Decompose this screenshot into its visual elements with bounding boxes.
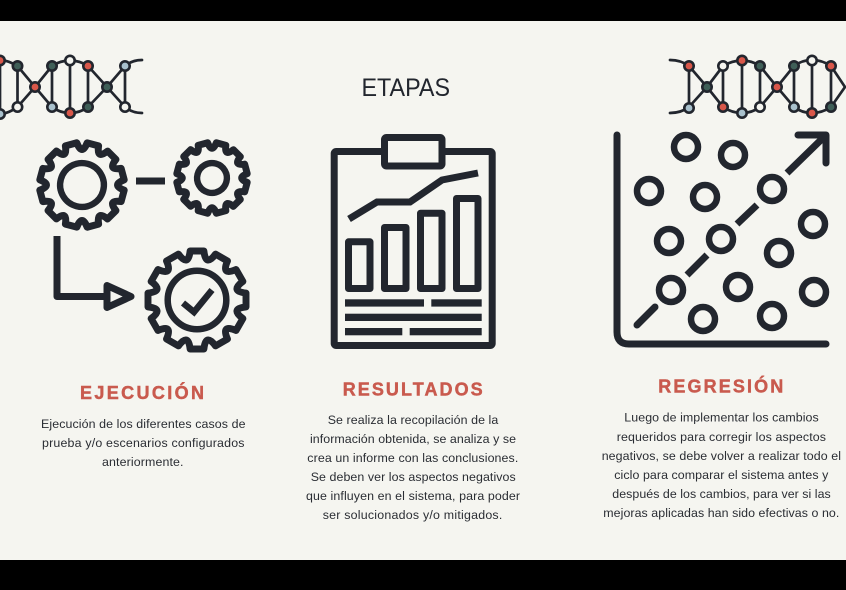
small gear bbox=[169, 135, 255, 221]
text block: ejecución bbox=[41, 417, 246, 469]
clip bbox=[384, 138, 442, 166]
text block: regresión: después de los cambios, para ver si las bbox=[612, 487, 831, 501]
text block: regresión bbox=[602, 410, 841, 520]
icon: clipboard report bbox=[334, 138, 492, 346]
text lines bbox=[345, 299, 482, 335]
check gear bbox=[148, 251, 246, 349]
axes bbox=[617, 135, 826, 344]
arrow bbox=[57, 236, 131, 308]
text block: regresión: negativos, se debe volver a realizar todo el bbox=[602, 449, 841, 463]
text block: regresión: mejoras aplicadas han sido efectivas o no. bbox=[603, 506, 839, 520]
heading: resultados: RESULTADOS bbox=[343, 380, 483, 400]
bars bbox=[348, 198, 478, 288]
text block: regresión: ciclo para comparar el sistema antes y bbox=[614, 468, 829, 482]
text block: regresión: requeridos para corregir los aspectos bbox=[617, 430, 826, 444]
trend line bbox=[349, 173, 478, 219]
clipboard frame bbox=[334, 152, 492, 346]
title: ETAPAS bbox=[362, 74, 450, 102]
text block: resultados: información obtenida, se analiza y se bbox=[310, 432, 516, 446]
text block: resultados: que influyen en el sistema, para poder bbox=[306, 489, 520, 503]
text block: ejecución: Ejecución de los diferentes casos de bbox=[41, 417, 246, 431]
trend arrow bbox=[637, 135, 826, 325]
heading: ejecución: EJECUCIÓN bbox=[80, 382, 204, 403]
icon: DNA helix right bbox=[670, 56, 845, 118]
text block: resultados: Se realiza la recopilación de la bbox=[328, 413, 498, 427]
connector dash bbox=[136, 178, 165, 184]
icon: DNA helix left bbox=[0, 56, 142, 119]
text block: ejecución: prueba y/o escenarios configurados bbox=[42, 436, 244, 450]
heading: regresión: REGRESIÓN bbox=[658, 376, 783, 397]
text block: resultados bbox=[306, 413, 520, 522]
icon: gears workflow bbox=[30, 133, 255, 349]
data points bbox=[637, 135, 826, 331]
icon: scatter plot with trend bbox=[617, 135, 826, 344]
text block: resultados: crea un informe con las conclusiones. bbox=[307, 451, 518, 465]
text block: resultados: Se deben ver los aspectos negativos bbox=[311, 470, 516, 484]
large gear bbox=[30, 133, 134, 237]
text block: regresión: Luego de implementar los cambios bbox=[624, 410, 819, 424]
text block: ejecución: anteriormente. bbox=[102, 455, 184, 469]
text block: resultados: ser solucionados y/o mitigados. bbox=[323, 508, 502, 522]
